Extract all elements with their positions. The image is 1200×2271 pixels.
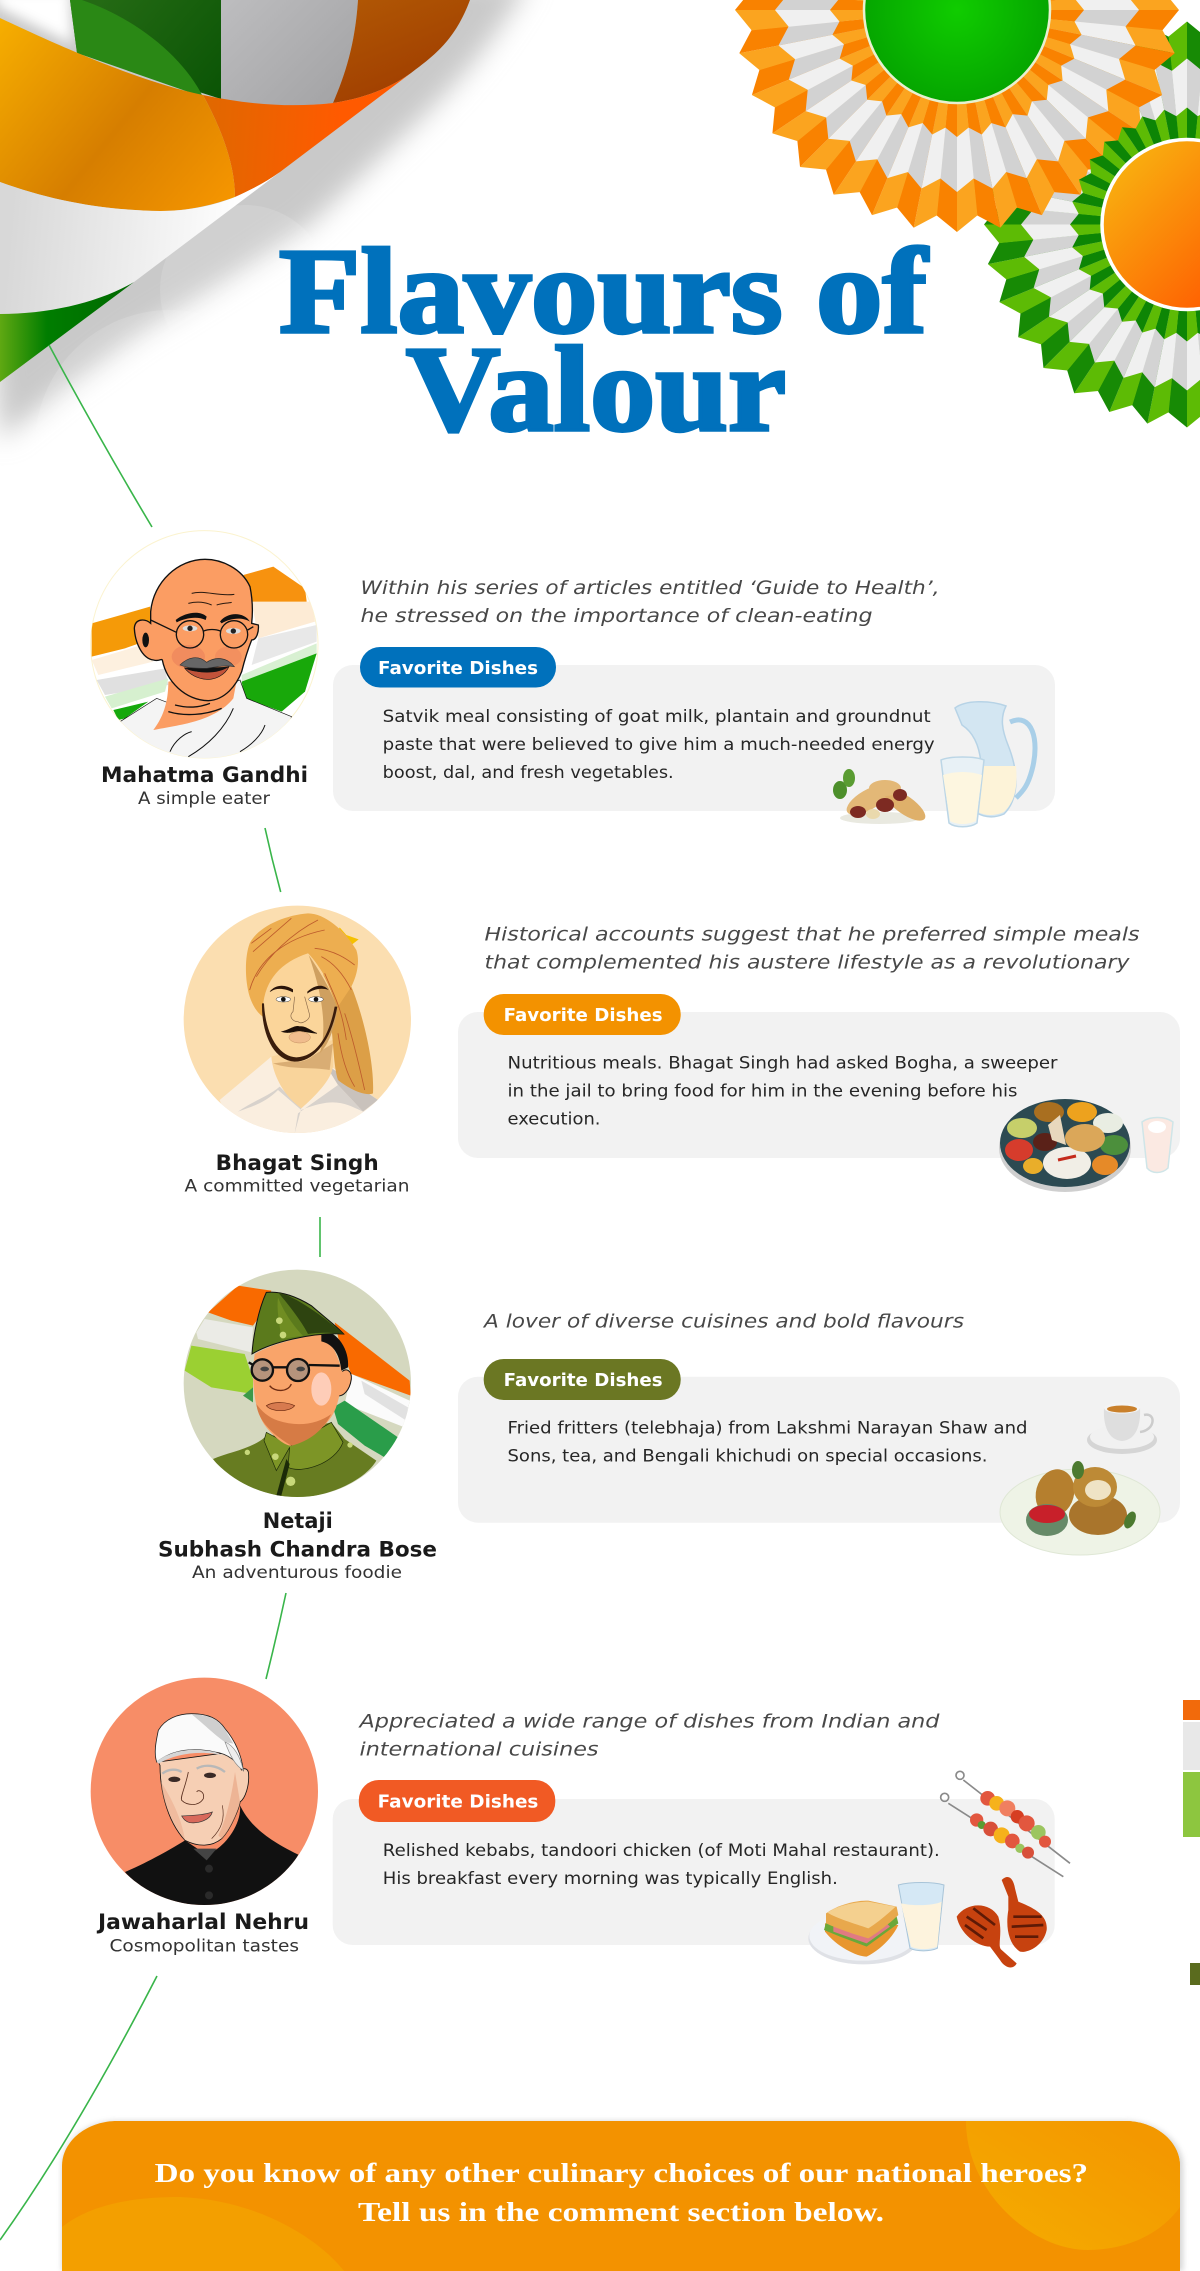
badge: Favorite Dishes xyxy=(359,1780,555,1822)
name: Netaji Subhash Chandra Bose xyxy=(158,1509,437,1562)
badge: Favorite Dishes: Favorite Dishes xyxy=(378,1792,538,1813)
portrait: Netaji xyxy=(184,1270,411,1497)
quote: Netaji: A lover of diverse cuisines and bold flavours xyxy=(482,1311,964,1333)
tagline: A committed vegetarian: A committed vegetarian xyxy=(184,1177,410,1197)
title: Flavours of xyxy=(279,224,928,359)
quote: Nehru: international cuisines xyxy=(360,1739,599,1761)
icon: thali plate xyxy=(999,1099,1131,1192)
connecting green timeline lines xyxy=(0,345,320,2240)
quote: Bhagat Singh: that complemented his austere lifestyle as a revolutionary xyxy=(484,952,1130,974)
dishes text: Netaji: Fried fritters (telebhaja) from Lakshmi Narayan Shaw and xyxy=(508,1419,1028,1439)
icon: sandwich plate xyxy=(808,1901,918,1964)
portrait: Bhagat Singh xyxy=(184,906,411,1140)
name: Mahatma Gandhi: Mahatma Gandhi xyxy=(101,763,308,787)
panel: Netaji Subhash Chandra Bose xyxy=(158,1270,1180,1583)
dishes text: Nehru: Relished kebabs, tandoori chicken (of Moti Mahal restaurant). xyxy=(383,1841,940,1861)
dishes text: Gandhi: paste that were believed to give him a much-needed energy xyxy=(383,735,935,755)
card: Nehru favourite dishes xyxy=(333,1799,1055,1945)
callout text xyxy=(155,2158,1088,2227)
icon: fritters plate xyxy=(1000,1461,1160,1555)
dishes text: Netaji: Sons, tea, and Bengali khichudi on special occasions. xyxy=(508,1447,988,1467)
decoration: clipped artwork at right edge xyxy=(1183,1700,1200,1985)
badge: Favorite Dishes: Favorite Dishes xyxy=(378,658,538,679)
dishes text: Bhagat Singh: Nutritious meals. Bhagat Singh had asked Bogha, a sweeper xyxy=(508,1054,1058,1074)
dishes text: Nehru: His breakfast every morning was typically English. xyxy=(383,1869,838,1889)
dishes text: Gandhi: boost, dal, and fresh vegetables. xyxy=(383,763,674,783)
icon: milk jug and glass xyxy=(941,702,1035,827)
dishes text: Gandhi: Satvik meal consisting of goat milk, plantain and groundnut xyxy=(383,707,931,727)
name: Netaji Subhash Chandra Bose: Netaji xyxy=(263,1509,333,1533)
card: Gandhi favourite dishes xyxy=(333,665,1055,811)
quote: Gandhi xyxy=(360,577,940,627)
panel: Bhagat Singh xyxy=(184,906,1180,1197)
badge: Favorite Dishes xyxy=(484,1359,681,1400)
quote: Bhagat Singh xyxy=(484,924,1140,974)
dishes text: Gandhi xyxy=(383,707,935,783)
callout: comment prompt banner xyxy=(62,2121,1183,2271)
icon: kebab skewers xyxy=(941,1771,1070,1877)
icon: lassi glass xyxy=(1142,1118,1173,1172)
badge: Favorite Dishes: Favorite Dishes xyxy=(504,1005,663,1026)
portrait: Gandhi xyxy=(91,531,318,765)
icon: tandoori chicken xyxy=(957,1877,1047,1967)
title xyxy=(279,224,928,457)
name: Jawaharlal Nehru: Jawaharlal Nehru xyxy=(96,1910,309,1934)
icon: glass of milk xyxy=(898,1882,944,1951)
dishes text: Bhagat Singh xyxy=(508,1054,1058,1129)
dishes text: Nehru xyxy=(383,1841,940,1889)
dishes text: Bhagat Singh: in the jail to bring food for him in the evening before his xyxy=(508,1082,1018,1102)
portrait: Nehru xyxy=(91,1678,318,1905)
panel: Mahatma Gandhi xyxy=(91,531,1055,827)
badge: Favorite Dishes xyxy=(484,994,681,1035)
card: Bhagat Singh favourite dishes xyxy=(458,1012,1180,1158)
dishes text: Bhagat Singh: execution. xyxy=(508,1109,600,1129)
name: Bhagat Singh: Bhagat Singh xyxy=(216,1151,379,1175)
callout text: Tell us in the comment section below. xyxy=(358,2197,884,2227)
quote: Gandhi: Within his series of articles entitled ‘Guide to Health’, xyxy=(360,577,940,599)
dishes text: Netaji xyxy=(508,1419,1028,1467)
quote: Nehru xyxy=(357,1711,941,1761)
ribbon: tricolour fold top-left xyxy=(0,0,530,580)
quote: Nehru: Appreciated a wide range of dishes from Indian and xyxy=(357,1711,941,1733)
icon: cup of tea xyxy=(1087,1402,1157,1454)
panel: Jawaharlal Nehru xyxy=(91,1678,1070,1967)
tagline: An adventurous foodie: An adventurous foodie xyxy=(192,1563,402,1583)
title: Valour xyxy=(406,322,786,457)
rosette: orange and green decoration top-right xyxy=(699,0,1200,461)
tagline: Cosmopolitan tastes: Cosmopolitan tastes xyxy=(110,1937,299,1957)
tagline: A simple eater: A simple eater xyxy=(138,789,270,809)
name: Netaji Subhash Chandra Bose: Subhash Chandra Bose xyxy=(158,1538,437,1562)
callout text: Do you know of any other culinary choices of our national heroes? xyxy=(155,2158,1088,2188)
quote: Gandhi: he stressed on the importance of clean-eating xyxy=(360,605,872,627)
icon: groundnuts xyxy=(833,769,930,826)
card: Netaji favourite dishes xyxy=(458,1377,1180,1523)
badge: Favorite Dishes xyxy=(360,647,556,688)
badge: Favorite Dishes: Favorite Dishes xyxy=(504,1370,663,1391)
quote: Bhagat Singh: Historical accounts suggest that he preferred simple meals xyxy=(484,924,1140,946)
